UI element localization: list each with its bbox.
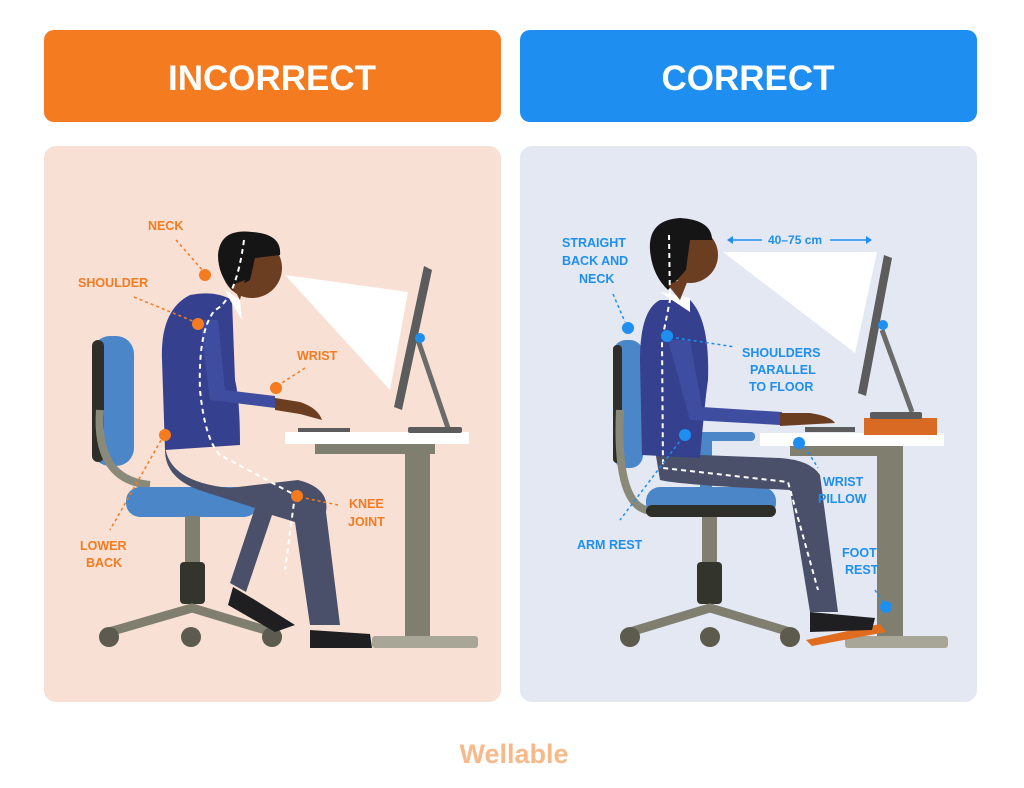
logo: Wellable: Wellable (459, 739, 569, 769)
sight cone left (285, 275, 408, 390)
distance arrow: 40–75 cm (768, 233, 822, 247)
labels right: PARALLEL (750, 363, 816, 377)
header: correct: CORRECT (661, 59, 835, 98)
labels left: WRIST (297, 349, 338, 363)
sight cone right (723, 252, 877, 353)
chair right (613, 340, 800, 647)
labels left: BACK (86, 556, 122, 570)
labels right: WRIST (823, 475, 864, 489)
monitor left (298, 266, 462, 433)
distance arrow (727, 233, 872, 247)
labels right: FOOT (842, 546, 877, 560)
labels right (562, 236, 892, 613)
chair left (92, 336, 282, 647)
person left (162, 231, 372, 648)
labels right: STRAIGHT (562, 236, 626, 250)
panel: correct (520, 146, 977, 702)
labels left: SHOULDER (78, 276, 148, 290)
header: incorrect (44, 30, 501, 122)
labels right: TO FLOOR (749, 380, 813, 394)
labels right: SHOULDERS (742, 346, 820, 360)
labels left: LOWER (80, 539, 127, 553)
person right (640, 218, 875, 632)
header: incorrect: INCORRECT (168, 59, 376, 98)
labels right: BACK AND (562, 254, 628, 268)
labels left: JOINT (348, 515, 385, 529)
header: correct (520, 30, 977, 122)
foot rest (806, 624, 886, 646)
panel: incorrect (44, 146, 501, 702)
labels right: PILLOW (818, 492, 867, 506)
desk right (760, 418, 948, 648)
labels left: NECK (148, 219, 183, 233)
monitor right (805, 255, 922, 432)
labels left: KNEE (349, 497, 384, 511)
labels right: ARM REST (577, 538, 643, 552)
labels left (78, 219, 385, 570)
labels right: REST (845, 563, 879, 577)
labels right: NECK (579, 272, 614, 286)
desk left (285, 432, 478, 648)
